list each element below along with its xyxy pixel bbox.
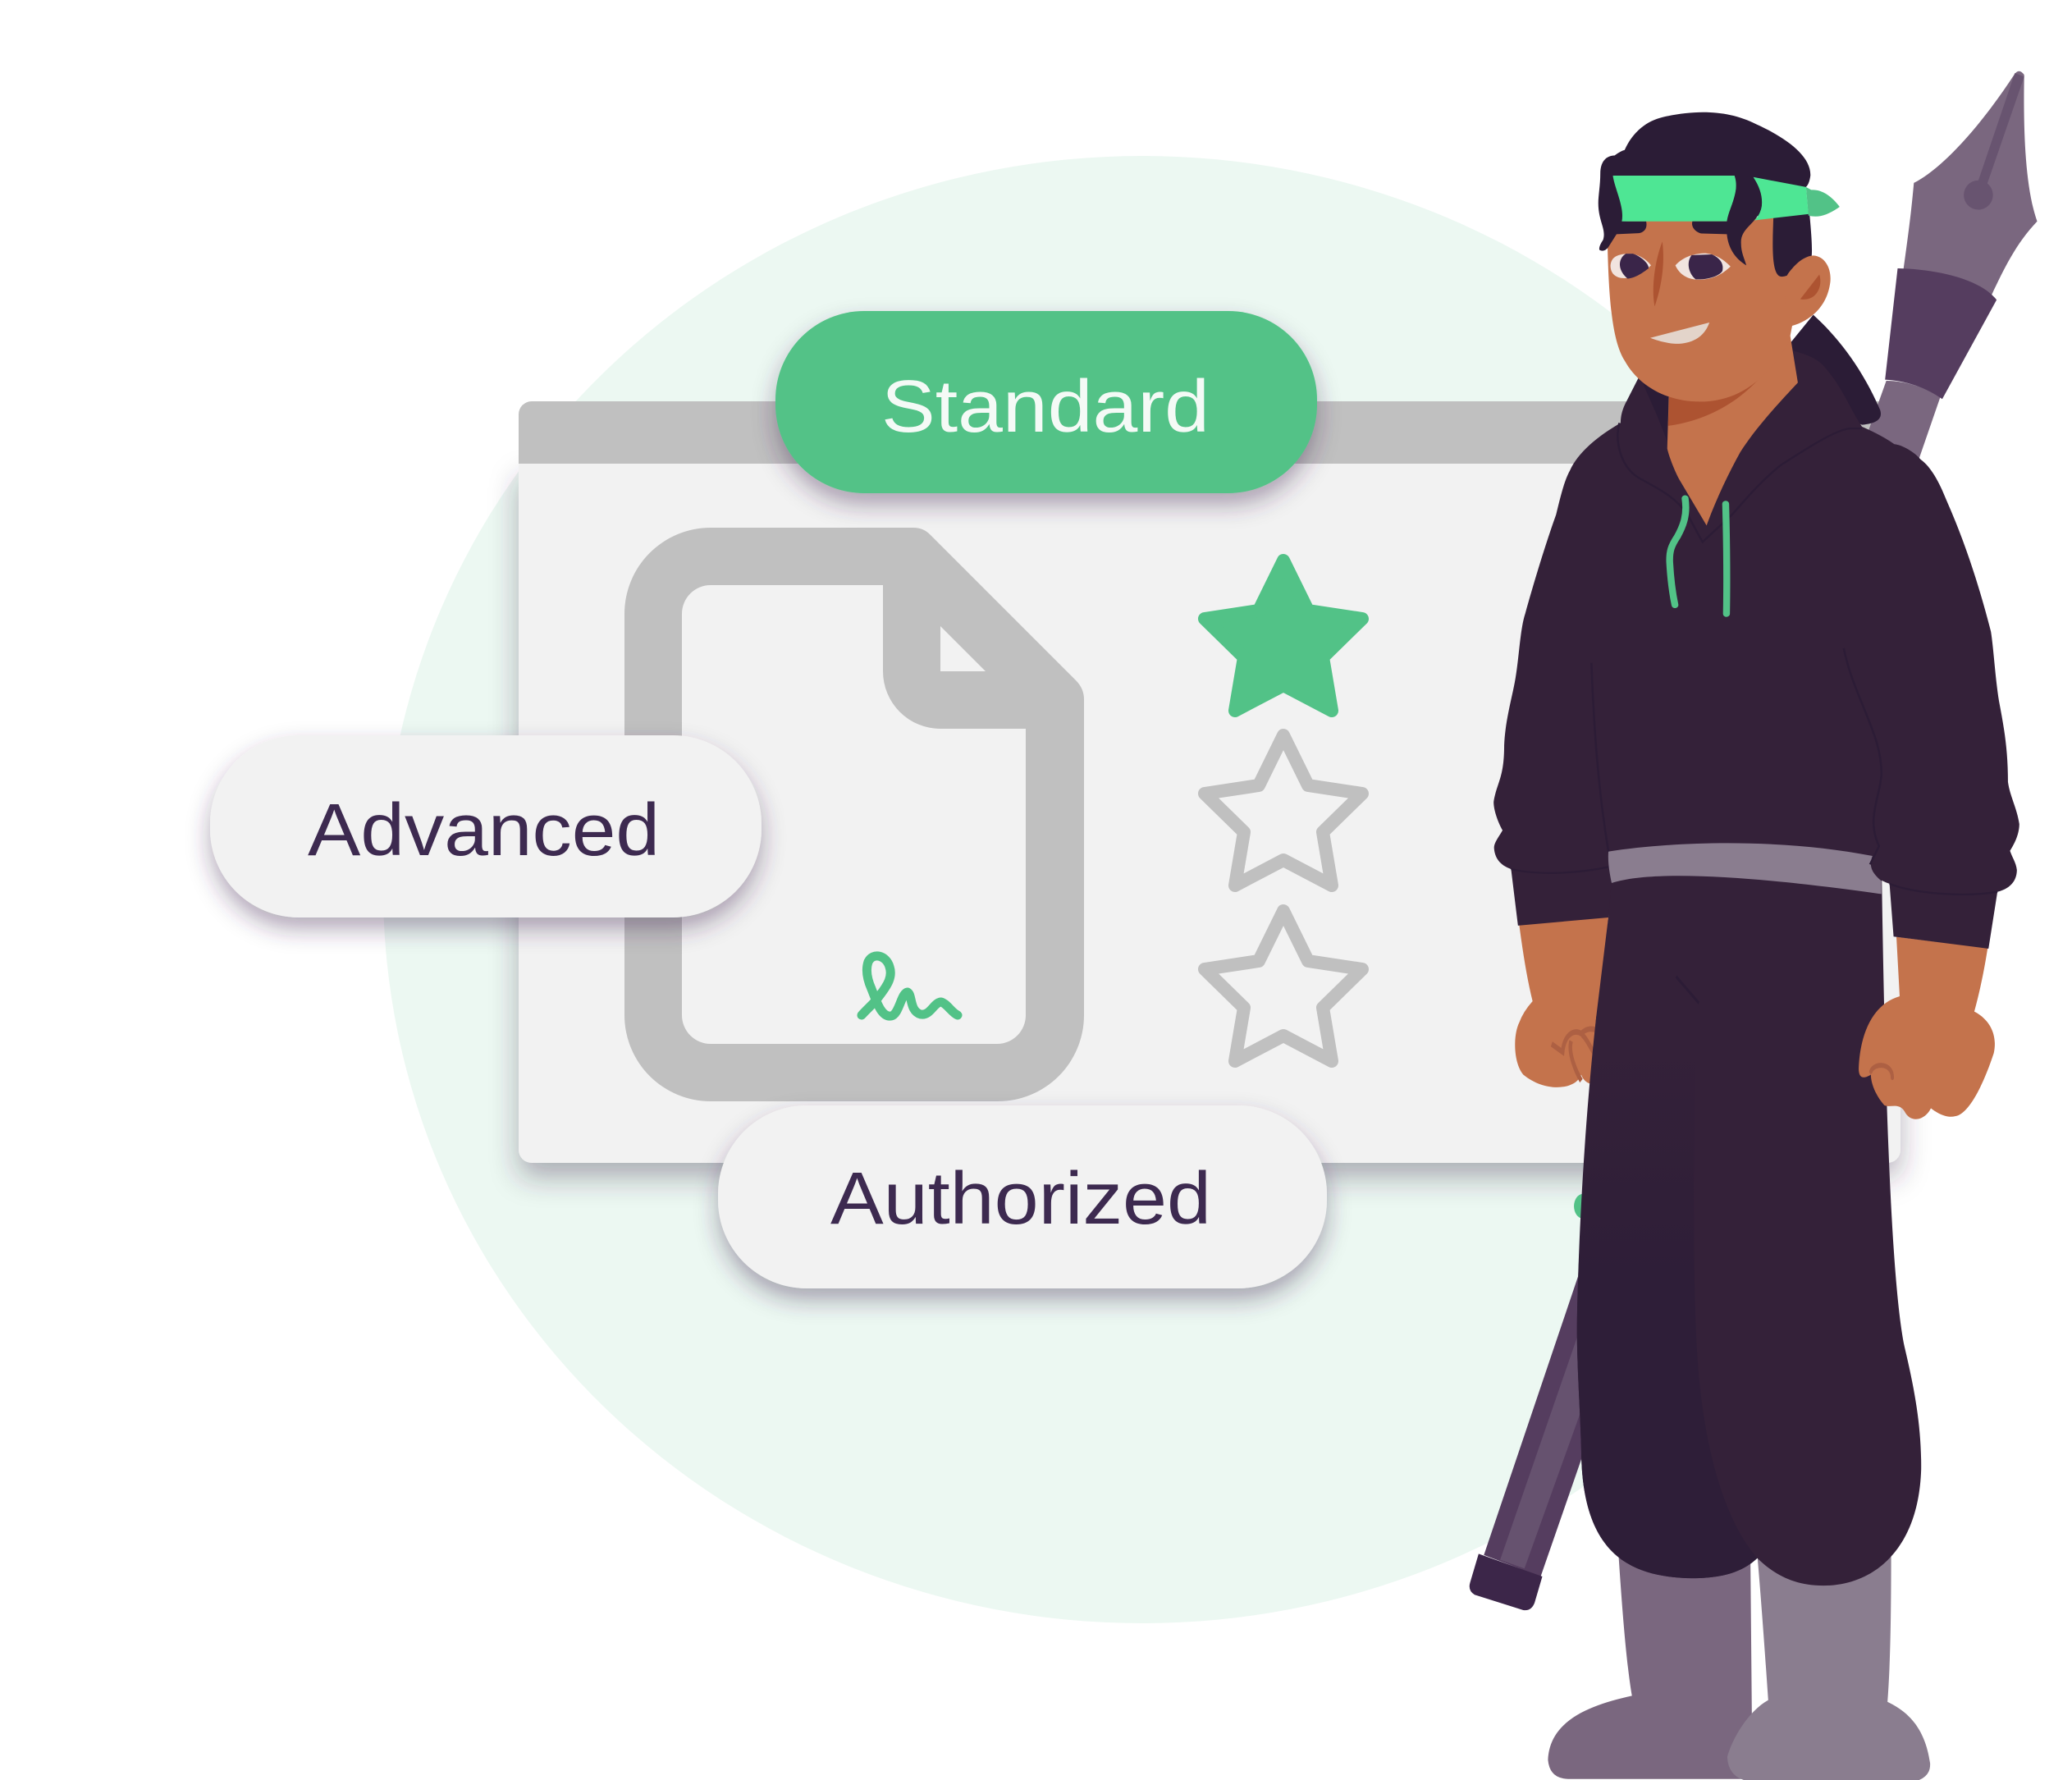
left eye: [1611, 254, 1651, 278]
fountain pen nib: [1866, 71, 2038, 460]
hoodie seams: [1511, 423, 1997, 895]
pill: Authorized: Authorized: [830, 1158, 1211, 1240]
pill: Standard: Standard: [881, 366, 1210, 448]
figure: person with fountain pen: [1470, 71, 2038, 1780]
pill: Standard: [775, 311, 1317, 493]
neck: [1667, 327, 1798, 525]
icon: signed document: [624, 528, 1084, 1101]
nose: [1653, 241, 1663, 306]
headband: [1613, 176, 1840, 222]
background circle: [383, 156, 1901, 1623]
head: [1599, 112, 1840, 525]
front hair lock and brow: [1692, 176, 1762, 265]
document outline: [624, 528, 1084, 1101]
panel: document window: [519, 401, 1900, 1163]
hair: [1599, 112, 1810, 251]
fountain pen shaft: [1470, 1194, 1592, 1610]
icon: filled star: [1205, 561, 1362, 711]
left leg and shoe: [1548, 1555, 1753, 1779]
back hair: [1772, 210, 1812, 277]
waist band: [1608, 843, 1882, 894]
pill: Advanced: [210, 735, 762, 917]
window body: [519, 464, 1900, 1163]
mouth: [1650, 323, 1709, 344]
left hand: [1515, 917, 1608, 1087]
right leg and shoe: [1727, 1555, 1930, 1780]
trousers: [1577, 851, 1921, 1586]
legs, hands and trousers: [1515, 851, 1995, 1780]
star rating: [1205, 561, 1362, 1061]
hoodie drawstrings: [1670, 498, 1727, 614]
hood back: [1785, 315, 1881, 425]
pill: Authorized: [718, 1105, 1327, 1288]
inner hood: [1641, 379, 1669, 442]
right eye: [1676, 254, 1731, 280]
hoodie: [1493, 315, 2019, 949]
signature scribble: [862, 956, 958, 1016]
icon: empty star: [1205, 735, 1362, 885]
pill: Advanced: Advanced: [308, 789, 660, 872]
face: [1608, 217, 1793, 401]
icon: empty star: [1205, 911, 1362, 1061]
ear: [1785, 255, 1831, 326]
right hand: [1859, 937, 1995, 1119]
chin shadow: [1668, 378, 1760, 426]
window title bar: [519, 401, 1900, 464]
hoodie body and sleeves: [1493, 350, 2019, 949]
